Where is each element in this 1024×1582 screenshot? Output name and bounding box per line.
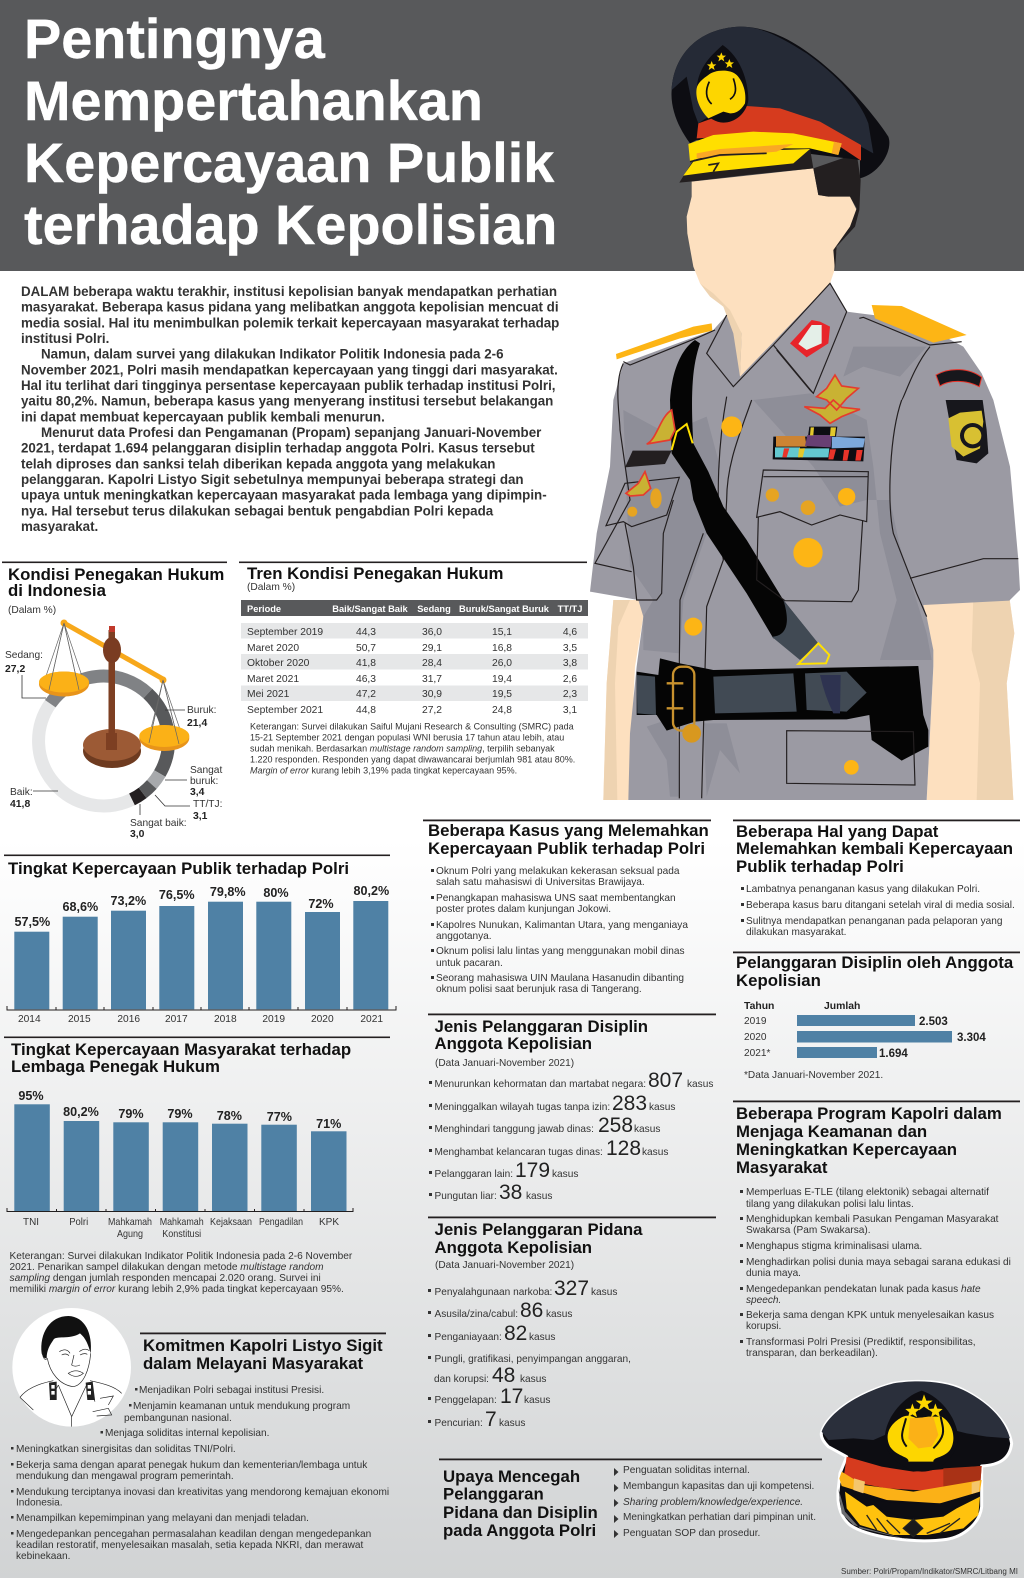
heading: [11, 1040, 351, 1076]
categories: Polri: [69, 1217, 88, 1228]
intro text block: Namun, dalam survei yang dilakukan Indikator Politik Indonesia pada 2-6: [41, 347, 504, 362]
heading: Meningkatkan Kepercayaan: [736, 1140, 957, 1159]
discipline list: kasus: [526, 1191, 552, 1202]
cap: [671, 27, 889, 183]
horizontal bars: 3.304: [957, 1032, 986, 1044]
discipline list: kasus: [687, 1079, 713, 1090]
buttons: [627, 416, 859, 775]
commitments list: keadilan restoratif, menyelesaikan masalah, setia kepada NKRI, dan merawat: [16, 1540, 363, 1551]
commitments list: Indonesia.: [16, 1498, 63, 1508]
categories: Mahkamah: [108, 1217, 152, 1228]
cases list: anggotanya.: [436, 931, 492, 942]
table rows: 3,1: [563, 705, 577, 716]
heading: Kondisi Penegakan Hukum: [8, 565, 224, 600]
program list: Bekerja sama dengan KPK untuk menyelesaikan kasus: [746, 1310, 994, 1321]
section rule: Kondisi: [2, 562, 227, 563]
criminal list: kasus: [529, 1332, 555, 1343]
heading: Masyarakat: [736, 1158, 828, 1177]
note: sampling dengan jumlah responden mencapai 2.020 orang. Survei ini: [10, 1273, 321, 1284]
intro text block: upaya untuk meningkatkan kepercayaan masyarakat pada lembaga yang dipimpin-: [21, 488, 547, 503]
panel: Komitmen Kapolri: [11, 1332, 389, 1562]
table note: Margin of error kurang lebih 3,19% pada tingkat kepercayaan 95%.: [250, 766, 517, 776]
labels: Sangat baik:: [130, 818, 187, 829]
insignia and medals: [625, 320, 988, 496]
commitments list: Menjadikan Polri sebagai institusi Presisi.: [139, 1385, 324, 1396]
cases list: salah satu mahasiswi di Universitas Brawijaya.: [436, 877, 645, 888]
panel: tren table: Buruk/Sangat Buruk: [459, 604, 550, 614]
panel: institutions trust chart: [4, 1036, 390, 1295]
intro text block: Hal itu terlihat dari tingginya persentase kepercayaan publik terhadap institusi Polri,: [21, 378, 556, 393]
cases list: Penangkapan mahasiswa UNS saat membentangkan: [436, 893, 676, 904]
heading: Jenis Pelanggaran Pidana: [434, 1220, 643, 1239]
table rows: September 2019: [247, 627, 323, 638]
title: terhadap Kepolisian: [24, 193, 557, 256]
values: 95%: [18, 1089, 44, 1103]
discipline list: kasus: [634, 1124, 660, 1135]
labels: [5, 650, 222, 840]
intro text block: masyarakat.: [21, 519, 98, 534]
values: 80,2%: [63, 1105, 99, 1119]
years: 2019: [262, 1014, 285, 1025]
program list: Menghadirkan polisi dunia maya sebagai sarana edukasi di: [746, 1257, 1011, 1268]
labels: buruk:: [190, 776, 218, 787]
discipline list: kasus: [649, 1102, 675, 1113]
labels: 3,0: [130, 829, 145, 840]
panel: Beberapa Hal: [733, 820, 1020, 938]
horizontal bars: 2020: [744, 1032, 767, 1043]
program list: Memperluas E-TLE (tilang elektonik) sebagai alternatif: [746, 1187, 989, 1198]
title: Mempertahankan: [24, 69, 483, 132]
discipline list: Menghindari tanggung jawab dinas:: [434, 1124, 594, 1135]
table rows: 47,2: [356, 689, 376, 700]
discipline list: 179: [515, 1159, 550, 1182]
cases list: [431, 866, 688, 995]
table rows: 4,6: [563, 627, 577, 638]
panel: Beberapa Program: [733, 1100, 1020, 1359]
heading: pada Anggota Polri: [443, 1521, 596, 1540]
discipline list: kasus: [552, 1169, 578, 1180]
table rows: 2,3: [563, 689, 577, 700]
criminal list: Pungli, gratifikasi, penyimpangan anggaran,: [434, 1354, 631, 1365]
discipline list: 807: [648, 1069, 683, 1092]
table rows: 28,4: [422, 658, 442, 669]
hair: [813, 153, 861, 271]
bars: [14, 1104, 347, 1212]
categories: [23, 1217, 339, 1240]
subtitle: (Data Januari-November 2021): [435, 1260, 574, 1271]
intro text block: institusi Polri.: [21, 331, 109, 346]
labels: Buruk:: [187, 705, 216, 716]
belt: [637, 658, 928, 761]
criminal list: 48: [492, 1364, 515, 1387]
horizontal bars: [744, 1001, 986, 1060]
heading: Upaya Mencegah: [443, 1467, 580, 1486]
table rows: 50,7: [356, 643, 376, 654]
prevention list: Penguatan SOP dan prosedur.: [623, 1528, 760, 1539]
cases list: poster protes dalam kunjungan Jokowi.: [436, 904, 611, 915]
commitments list: Bekerja sama dengan aparat penegak hukum dan kementerian/lembaga untuk: [16, 1460, 368, 1471]
criminal list: Pencurian:: [434, 1418, 483, 1429]
heading: Beberapa Hal yang Dapat: [736, 822, 939, 841]
heading: [143, 1336, 383, 1373]
commitments list: Mengedepankan pencegahan permasalahan keadilan dengan mengedepankan: [16, 1529, 371, 1540]
program list: Menghidupkan kembali Pasukan Pengaman Masyarakat: [746, 1214, 999, 1225]
note: 2021. Penarikan sampel dilakukan dengan metode multistage random: [10, 1262, 324, 1273]
panel: Upaya Mencegah: [439, 1458, 822, 1540]
values: 79,8%: [210, 885, 246, 899]
scale: [39, 620, 189, 768]
prevention list: Sharing problem/knowledge/experience.: [623, 1497, 803, 1508]
heading: Anggota Kepolisian: [434, 1238, 592, 1257]
prevention list: Membangun kapasitas dan uji kompetensi.: [623, 1481, 814, 1492]
heading: Kondisi Penegakan Hukum: di Indonesia: [8, 581, 107, 600]
table rows: September 2021: [247, 705, 323, 716]
labels: Sangat: [190, 765, 222, 776]
categories: KPK: [319, 1217, 339, 1228]
heading: [736, 1104, 1002, 1177]
heading: Beberapa Kasus yang Melemahkan: [428, 821, 709, 840]
horizontal bars: Jumlah: [824, 1001, 860, 1012]
labels: 3,1: [193, 811, 208, 822]
note: memiliki margin of error kurang lebih 2,9% pada tingkat kepercayaan 95%.: [10, 1284, 344, 1295]
table rows: 19,5: [492, 689, 512, 700]
labels: 21,4: [187, 718, 207, 729]
years: 2015: [68, 1014, 91, 1025]
table rows: Oktober 2020: [247, 658, 310, 669]
strap: [670, 340, 810, 638]
commitments list: Menjamin keamanan untuk mendukung program: [133, 1401, 350, 1412]
values: 76,5%: [159, 888, 195, 902]
criminal list: kasus: [499, 1418, 525, 1429]
commitments list: pembangunan nasional.: [124, 1413, 232, 1424]
prevention list: Penguatan soliditas internal.: [623, 1465, 750, 1476]
labels: Baik:: [10, 787, 33, 798]
categories: Pengadilan: [259, 1217, 303, 1228]
pockets: [606, 470, 915, 785]
table rows: 3,5: [563, 643, 577, 654]
discipline list: Meninggalkan wilayah tugas tanpa izin:: [434, 1102, 610, 1113]
program list: Menghapus stigma kriminalisasi ulama.: [746, 1241, 922, 1252]
values: 79%: [167, 1107, 193, 1121]
discipline list: 128: [606, 1137, 641, 1160]
uniform shirt: [590, 283, 1020, 800]
horizontal bars: 2.503: [919, 1016, 948, 1028]
heading: [428, 821, 709, 858]
values: 57,5%: [14, 915, 50, 929]
program list: Mengedepankan pendekatan lunak pada kasus hate: [746, 1284, 981, 1295]
discipline list: Menurunkan kehormatan dan martabat negara:: [434, 1079, 646, 1090]
intro text block: nya. Hal tersebut terus dilakukan sebagai bentuk pengabdian Polri kepada: [21, 503, 494, 518]
header band: [0, 0, 1024, 271]
heading: Melemahkan kembali Kepercayaan: [736, 839, 1013, 858]
intro text block: pelanggaran. Kapolri Listyo Sigit sebetulnya mempunyai beberapa strategi dan: [21, 472, 524, 487]
criminal list: 82: [504, 1322, 527, 1345]
heading: [736, 822, 1013, 876]
panel: tren table: TT/TJ: [558, 604, 582, 614]
years: 2014: [18, 1014, 41, 1025]
labels: Sedang:: [5, 650, 43, 661]
table rows: 41,8: [356, 658, 376, 669]
heading: Beberapa Program Kapolri dalam: [736, 1104, 1002, 1123]
portrait: Kapolri: [12, 1308, 131, 1427]
axis: [7, 1208, 353, 1212]
axis: [7, 1006, 396, 1010]
labels: 3,4: [190, 787, 205, 798]
heading: [443, 1467, 598, 1540]
values: 72%: [308, 897, 334, 911]
heading: Menjaga Keamanan dan: [736, 1122, 927, 1141]
discipline list: 258: [598, 1114, 633, 1137]
panel: Beberapa Kasus: [423, 820, 711, 995]
years: 2016: [117, 1014, 140, 1025]
table note: [250, 722, 575, 776]
heading: [434, 1017, 648, 1053]
cap band: [697, 106, 861, 161]
criminal list: kasus: [520, 1374, 546, 1385]
list: Beberapa kasus baru ditangani setelah viral di media sosial.: [746, 900, 1015, 911]
cases list: oknum polisi saat berunjuk rasa di Tangerang.: [436, 984, 642, 995]
values: 80,2%: [353, 884, 389, 898]
discipline list: Pelanggaran lain:: [434, 1169, 513, 1180]
heading: Kepercayaan Publik terhadap Polri: [428, 839, 705, 858]
categories: Agung: [117, 1229, 143, 1240]
program list: Swakarsa (Pam Swakarsa).: [746, 1225, 871, 1236]
criminal list: 17: [500, 1385, 523, 1408]
footnote: *Data Januari-November 2021.: [744, 1070, 883, 1081]
criminal list: kasus: [546, 1309, 572, 1320]
heading: Tingkat Kepercayaan Masyarakat terhadap: [11, 1040, 351, 1059]
belt buckle: [667, 667, 694, 731]
heading: Publik terhadap Polri: [736, 857, 904, 876]
illustration: police officer: [590, 27, 1020, 800]
criminal list: 7: [485, 1408, 497, 1431]
list: Sulitnya mendapatkan penanganan pada pelaporan yang: [746, 916, 1002, 927]
years: 2021: [360, 1014, 383, 1025]
intro text block: yaitu 80,2%. Namun, beberapa kasus yang menyerang institusi tersebut belakangan: [21, 394, 553, 409]
heading: Kondisi Penegakan Hukum: Kondisi Penegakan Hukum: [8, 565, 224, 584]
criminal list: 86: [520, 1299, 543, 1322]
cases list: Kapolres Nunukan, Kalimantan Utara, yang menganiaya: [436, 920, 688, 931]
heading: [434, 1220, 643, 1257]
criminal list: Penganiayaan:: [434, 1332, 502, 1343]
list: Lambatnya penanganan kasus yang dilakukan Polri.: [746, 884, 980, 895]
criminal list: 327: [554, 1277, 589, 1300]
intro text block: [21, 284, 559, 534]
categories: Mahkamah: [160, 1217, 204, 1228]
donut chart with scale: [5, 620, 222, 840]
panel: tren table: (Dalam %): [247, 582, 295, 593]
subtitle: (Dalam %): [8, 605, 56, 616]
cases list: Oknum Polri yang melakukan kekerasan seksual pada: [436, 866, 680, 877]
categories: Kejaksaan: [210, 1217, 252, 1228]
discipline list: 38: [499, 1181, 522, 1204]
criminal list: kasus: [591, 1287, 617, 1298]
categories: Konstitusi: [162, 1229, 201, 1240]
subtitle: (Data Januari-November 2021): [435, 1058, 574, 1069]
table rows: 3,8: [563, 658, 577, 669]
discipline list: Pungutan liar:: [434, 1191, 497, 1202]
values: [14, 884, 389, 929]
panel: Jenis Pelanggaran Disiplin: [428, 1014, 716, 1204]
heading: Pidana dan Disiplin: [443, 1503, 598, 1522]
horizontal bars: 2019: [744, 1016, 767, 1027]
table rows: 30,9: [422, 689, 442, 700]
table rows: 27,2: [422, 705, 442, 716]
heading: Komitmen Kapolri Listyo Sigit: [143, 1336, 383, 1355]
criminal list: [428, 1277, 631, 1431]
table rows: 24,8: [492, 705, 512, 716]
program list: Transformasi Polri Presisi (Prediktif, responsibilitas,: [746, 1337, 976, 1348]
criminal list: Penggelapan:: [434, 1395, 497, 1406]
table rows: 19,4: [492, 674, 512, 685]
table rows: 46,3: [356, 674, 376, 685]
values: 73,2%: [110, 894, 146, 908]
list: dilakukan masyarakat.: [746, 927, 846, 938]
commitments list: mendukung dan mengawal program pemerintah.: [16, 1471, 234, 1482]
horizontal bars: 1.694: [879, 1048, 908, 1060]
bars: [14, 901, 388, 1009]
table note: 15-21 September 2021 dengan populasi WNI berusia 17 tahun atau lebih, atau: [250, 732, 564, 742]
heading: Jenis Pelanggaran Disiplin: [434, 1017, 648, 1036]
intro text block: DALAM beberapa waktu terakhir, institusi kepolisian banyak mendapatkan perhatian: [21, 284, 557, 299]
commitments list: Menjaga soliditas internal kepolisian.: [105, 1428, 269, 1439]
criminal list: kasus: [524, 1395, 550, 1406]
cap badge: [697, 45, 748, 123]
table rows: 16,8: [492, 643, 512, 654]
horizontal bars: 2021*: [744, 1048, 770, 1059]
panel: Jenis Pelanggaran Pidana: [428, 1216, 716, 1431]
commitments list: Menampilkan kepemimpinan yang melayani dan menjadi teladan.: [16, 1513, 309, 1524]
panel: tren table: [239, 562, 588, 776]
intro text block: media sosial. Hal itu menimbulkan polemik terkait kepercayaan masyarakat terhadap: [21, 315, 559, 330]
years: 2018: [214, 1014, 237, 1025]
intro text block: ini dapat membuat kepercayaan publik kembali menurun.: [21, 409, 385, 424]
years: 2020: [311, 1014, 334, 1025]
icon: police cap: [821, 1381, 1012, 1541]
note: Keterangan: Survei dilakukan Indikator Politik Indonesia pada 2-6 November: [10, 1251, 353, 1262]
table note: 1.220 responden. Responden yang dapat diwawancarai berjumlah 981 atau 80%.: [250, 754, 575, 764]
program list: transparan, dan berkeadilan).: [746, 1348, 878, 1359]
heading: Kepolisian: [736, 971, 821, 990]
leader lines: [22, 675, 190, 815]
source: Sumber: Polri/Propam/Indikator/SMRC/Litbang MI: [841, 1567, 1018, 1576]
criminal list: Penyalahgunaan narkoba:: [434, 1287, 552, 1298]
values: 78%: [217, 1109, 242, 1123]
neck and face: [687, 168, 857, 377]
discipline list: [429, 1069, 713, 1204]
table rows: 2,6: [563, 674, 577, 685]
panel: tren table: Periode: [247, 604, 281, 614]
commitments list: Mendukung terciptanya inovasi dan kreativitas yang mendorong kemajuan ekonomi: [16, 1487, 389, 1498]
intro text block: 2021, terdapat 1.694 pelanggaran disiplin terhadap anggota Polri. Kasus tersebut: [21, 441, 535, 456]
panel: Pelanggaran Disiplin chart: [733, 952, 1020, 1081]
note: [10, 1251, 353, 1295]
title: Pentingnya: [24, 7, 326, 70]
program list: [740, 1187, 1011, 1359]
list: [741, 884, 1015, 938]
horizontal bars: Tahun: [744, 1001, 774, 1012]
heading: Pelanggaran: [443, 1484, 544, 1504]
epaulettes: [616, 305, 967, 359]
title: Kepercayaan Publik: [24, 131, 555, 194]
heading: [736, 953, 1014, 990]
intro text block: telah diproses dan sanksi telah diberikan kepada anggota yang melakukan: [21, 456, 495, 471]
table note: Keterangan: Survei dilakukan Saiful Mujani Research & Consulting (SMRC) pada: [250, 722, 574, 732]
commitments list: Meningkatkan sinergisitas dan soliditas TNI/Polri.: [16, 1444, 236, 1455]
cases list: untuk pacaran.: [436, 958, 503, 969]
discipline list: kasus: [642, 1147, 668, 1158]
program list: speech.: [746, 1295, 781, 1306]
table rows: 44,8: [356, 705, 376, 716]
table rows: 26,0: [492, 658, 512, 669]
values: 77%: [267, 1110, 292, 1124]
values: [18, 1089, 341, 1131]
heading: Pelanggaran Disiplin oleh Anggota: [736, 953, 1014, 972]
arms: [603, 590, 1014, 800]
panel: tren table: Sedang: [417, 604, 451, 614]
panel: public trust chart: [4, 854, 396, 1025]
heading: Tingkat Kepercayaan Publik terhadap Polri: [8, 859, 349, 878]
table rows: Maret 2021: [247, 674, 299, 685]
criminal list: Asusila/zina/cabul:: [434, 1309, 518, 1320]
table rows: [241, 623, 588, 716]
values: 68,6%: [62, 900, 98, 914]
criminal list: dan korupsi:: [434, 1374, 489, 1385]
intro text block: Menurut data Profesi dan Pengamanan (Propam) sepanjang Januari-November: [41, 425, 541, 440]
commitments list: kebinekaan.: [16, 1551, 70, 1562]
commitments list: [11, 1385, 389, 1562]
heading: Anggota Kepolisian: [434, 1034, 592, 1053]
years: 2017: [165, 1014, 188, 1025]
cases list: Seorang mahasiswa UIN Maulana Hasanudin dibanting: [436, 973, 684, 984]
table rows: 29,1: [422, 643, 442, 654]
prevention list: Meningkatkan perhatian dari pimpinan unit.: [623, 1512, 816, 1523]
program list: korupsi.: [746, 1321, 781, 1332]
values: 79%: [118, 1107, 144, 1121]
values: 80%: [263, 886, 289, 900]
table rows: 44,3: [356, 627, 376, 638]
program list: dunia maya.: [746, 1268, 801, 1279]
labels: 27,2: [5, 664, 25, 675]
years: [18, 1014, 383, 1025]
discipline list: Menghambat kelancaran tugas dinas:: [434, 1147, 603, 1158]
panel: tren table: Baik/Sangat Baik: [332, 604, 409, 614]
table rows: 31,7: [422, 674, 442, 685]
categories: TNI: [23, 1217, 39, 1228]
heading: dalam Melayani Masyarakat: [143, 1354, 364, 1373]
table note: sudah menikah. Berdasarkan multistage random sampling, terpilih sebanyak: [250, 744, 555, 754]
table rows: Mei 2021: [247, 689, 290, 700]
prevention list: [614, 1465, 816, 1539]
table rows: 36,0: [422, 627, 442, 638]
heading: Tren Kondisi Penegakan Hukum: [247, 564, 503, 583]
table rows: 15,1: [492, 627, 512, 638]
intro text block: November 2021, Polri masih mendapatkan kepercayaan yang tinggi dari masyarakat.: [21, 362, 558, 377]
labels: TT/TJ:: [193, 799, 222, 810]
discipline list: 283: [612, 1092, 647, 1115]
heading: Lembaga Penegak Hukum: [11, 1057, 220, 1076]
values: 71%: [316, 1117, 341, 1131]
table rows: Maret 2020: [247, 643, 299, 654]
title: [24, 7, 557, 256]
table header: [241, 600, 588, 616]
cases list: Oknum polisi lalu lintas yang menggunakan mobil dinas: [436, 946, 685, 957]
program list: tilang yang dilakukan polisi lalu lintas.: [746, 1199, 914, 1210]
labels: 41,8: [10, 799, 30, 810]
intro text block: masyarakat. Beberapa kasus pidana yang melibatkan anggota kepolisian mencuat di: [21, 300, 559, 315]
